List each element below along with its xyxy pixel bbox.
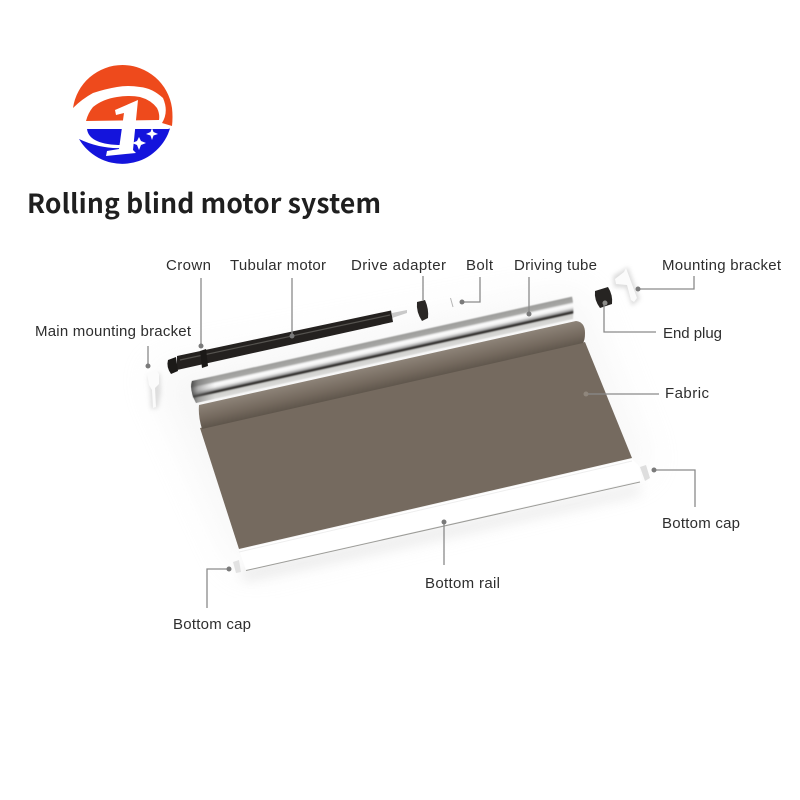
logo numeral: [106, 100, 138, 156]
label: drive adapter: [351, 257, 446, 300]
label: fabric: Fabric: [665, 385, 710, 402]
label: tubular motor: [230, 257, 326, 338]
bottom cap left: [233, 560, 241, 573]
soft shadows: [240, 485, 640, 582]
label: bottom cap right: [652, 468, 740, 532]
label: main mounting bracket: Main mounting bracket: [35, 323, 192, 340]
label: bottom cap left: [173, 566, 251, 633]
label: fabric: [584, 385, 710, 402]
main mounting bracket: [147, 370, 161, 409]
label: end plug: End plug: [663, 325, 722, 342]
label: tubular motor: Tubular motor: [230, 257, 326, 274]
logo inner red: [86, 96, 159, 121]
bottom rail: [233, 459, 650, 573]
label: mounting bracket: Mounting bracket: [662, 257, 782, 274]
logo: [73, 65, 172, 164]
label: bottom rail: [425, 520, 500, 592]
label: bolt: [460, 257, 494, 304]
fabric: [199, 321, 632, 549]
label: crown: Crown: [166, 257, 211, 274]
label: drive adapter: Drive adapter: [351, 257, 446, 274]
label: main mounting bracket: [35, 323, 192, 368]
drive adapter: [417, 300, 428, 321]
logo stars: [132, 128, 158, 150]
label: bottom cap right: Bottom cap: [662, 515, 740, 532]
bottom cap right: [640, 465, 650, 481]
tubular motor: [167, 310, 407, 374]
label: driving tube: Driving tube: [514, 257, 597, 274]
fabric roll: [199, 321, 585, 429]
label: driving tube: [514, 257, 597, 316]
label: bottom rail: Bottom rail: [425, 575, 500, 592]
label: mounting bracket: [636, 257, 782, 292]
label: bottom cap left: Bottom cap: [173, 616, 251, 633]
bolt: [450, 298, 453, 307]
title: Rolling blind motor system: [27, 182, 381, 221]
end plug: [595, 287, 612, 308]
label: end plug: [604, 305, 722, 342]
soft background shading: [150, 290, 650, 570]
driving tube: [191, 297, 573, 403]
label: crown: [166, 257, 211, 348]
mounting bracket: [613, 267, 640, 306]
logo red dome: [73, 65, 172, 126]
logo blue base: [79, 128, 170, 164]
label: bolt: Bolt: [466, 257, 494, 274]
